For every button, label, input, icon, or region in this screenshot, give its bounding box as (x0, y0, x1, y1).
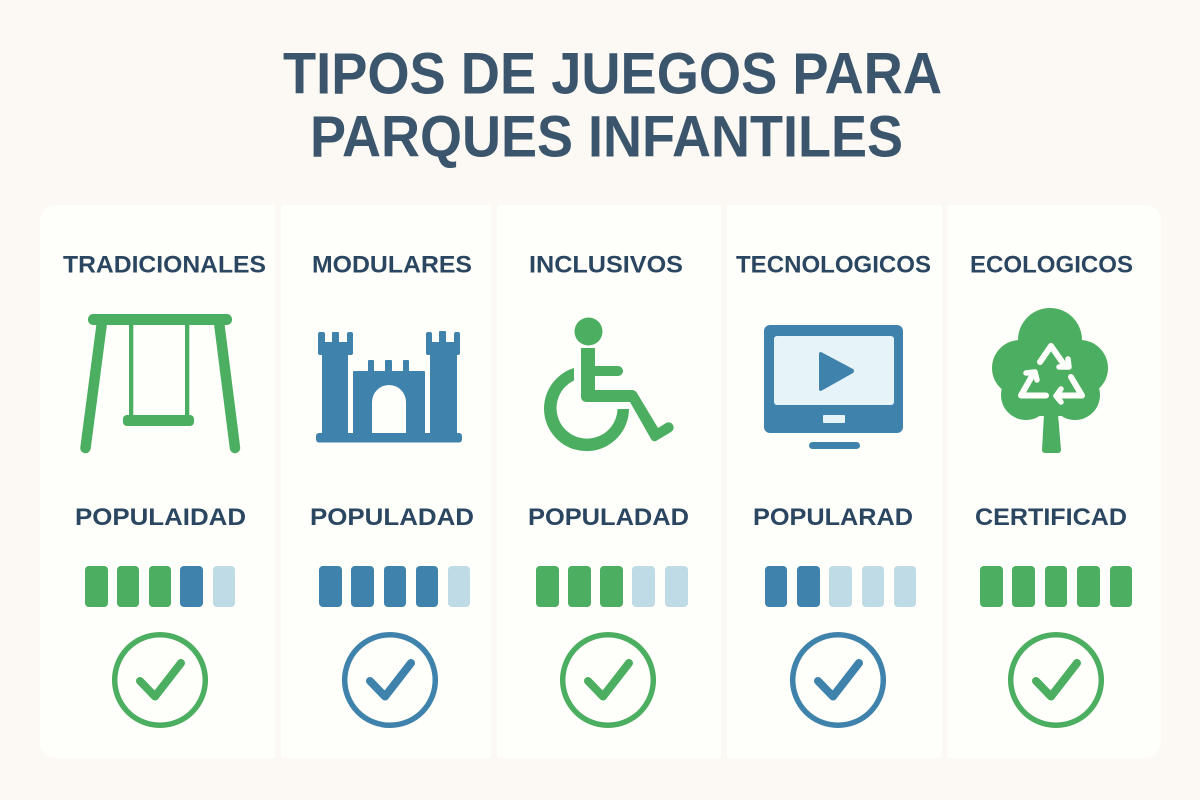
icon: castle (316, 331, 462, 442)
title (283, 42, 942, 170)
label: certificado: CERTIFICAD (975, 504, 1127, 531)
heading: inclusivos: INCLUSIVOS (529, 252, 683, 278)
panel: inclusivos (497, 205, 721, 758)
rating bars (85, 566, 235, 607)
title: PARQUES INFANTILES (310, 104, 903, 170)
check badge (115, 635, 205, 725)
rating bars (536, 566, 688, 607)
title: TIPOS DE JUEGOS PARA (283, 42, 942, 106)
heading: tradicionales: TRADICIONALES (63, 252, 266, 278)
panel: modulares (281, 205, 491, 758)
rating bars (980, 566, 1132, 607)
rating bars (319, 566, 470, 607)
label: popularidad: POPULADAD (310, 504, 474, 531)
icon: wheelchair (544, 318, 674, 451)
label: popularidad: POPULARAD (753, 504, 913, 531)
label: popularidad: POPULAIDAD (75, 504, 246, 531)
heading: tecnologicos: TECNOLOGICOS (736, 252, 931, 278)
panel: tradicionales (40, 205, 275, 758)
check badge (563, 635, 653, 725)
heading: ecologicos: ECOLOGICOS (970, 252, 1133, 278)
check badge (1011, 635, 1101, 725)
check badge (793, 635, 883, 725)
panel: tecnologicos (727, 205, 942, 758)
rating bars (765, 566, 916, 607)
icon: screen with play button (764, 325, 903, 449)
icon: swing (86, 314, 235, 448)
heading: modulares: MODULARES (312, 252, 472, 278)
check badge (345, 635, 435, 725)
label: popularidad: POPULADAD (528, 504, 689, 531)
icon: tree with recycling arrows (992, 308, 1108, 453)
panel: ecologicos (947, 205, 1161, 758)
